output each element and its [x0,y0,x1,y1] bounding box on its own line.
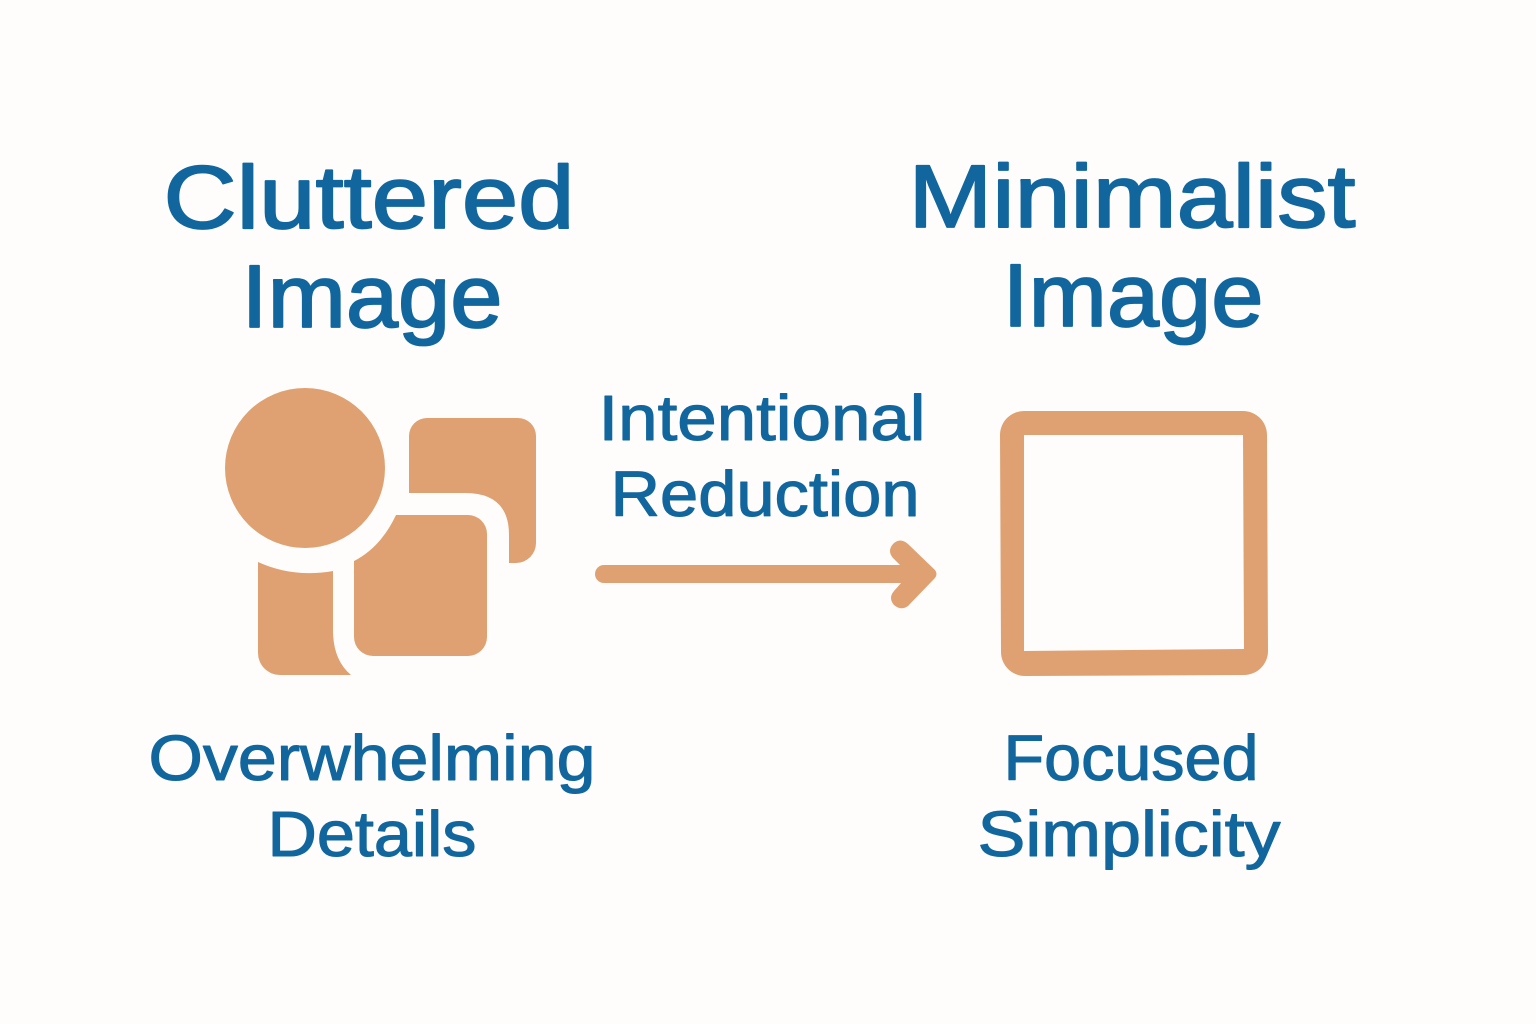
heading: minimalist image: Minimalist [908,146,1356,246]
caption: overwhelming details [148,722,596,870]
icon: minimalist square [1000,411,1268,676]
caption: overwhelming details: Overwhelming [148,722,596,794]
caption: focused simplicity: Focused [1004,722,1258,794]
heading: cluttered image: Image [242,246,502,346]
caption: overwhelming details: Details [268,798,476,870]
label: intentional reduction [598,382,926,530]
label: intentional reduction: Reduction [610,458,920,530]
label: intentional reduction: Intentional [598,382,926,454]
heading: cluttered image [164,147,574,346]
icon: cluttered overlapping shapes [225,388,536,675]
heading: minimalist image: Image [1002,245,1264,345]
heading: cluttered image: Cluttered [164,147,574,247]
arrow [595,540,936,608]
heading: minimalist image [908,146,1356,345]
caption: focused simplicity: Simplicity [978,798,1280,870]
caption: focused simplicity [978,722,1280,870]
